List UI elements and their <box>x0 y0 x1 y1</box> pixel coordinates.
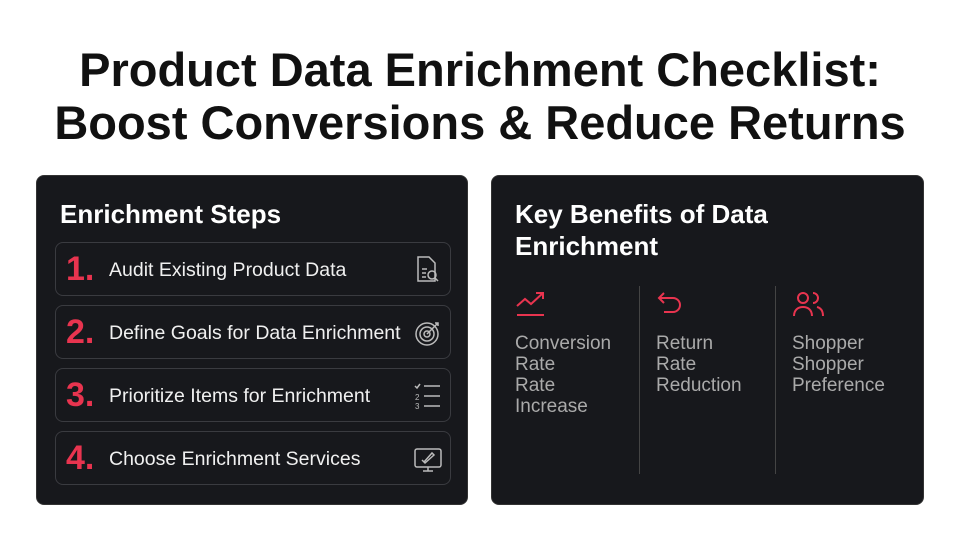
icon: rocket monitor <box>414 448 442 472</box>
step 3: Prioritize Items for Enrichment <box>109 385 370 407</box>
title <box>54 43 906 149</box>
benefit: shopper: Shopper <box>792 333 864 354</box>
benefit: return: Reduction <box>656 375 742 396</box>
title: Product Data Enrichment Checklist: <box>79 43 881 96</box>
step 3: 3. <box>66 376 94 414</box>
step 4 <box>55 431 451 485</box>
step 1: 1. <box>66 250 94 288</box>
step 4: Choose Enrichment Services <box>109 448 360 470</box>
panel: enrichment steps <box>36 175 468 505</box>
icon: target <box>415 322 439 346</box>
icon: numbered list: 3 <box>415 402 420 411</box>
benefit: conversion: Increase <box>515 396 588 417</box>
icon: document search <box>417 256 438 282</box>
step 1 <box>55 242 451 296</box>
heading: enrichment steps: Enrichment Steps <box>60 199 281 229</box>
icon: trend up <box>516 292 544 316</box>
benefit: return <box>656 292 742 396</box>
step 2: 2. <box>66 313 94 351</box>
step 1: Audit Existing Product Data <box>109 259 346 281</box>
benefit: conversion: Rate <box>515 354 555 375</box>
step 2: Define Goals for Data Enrichment <box>109 322 401 344</box>
heading: key benefits: Enrichment <box>515 231 658 261</box>
benefit: conversion: Rate <box>515 375 555 396</box>
step 2 <box>55 305 451 359</box>
panel: key benefits <box>491 175 924 505</box>
step 4: 4. <box>66 439 94 477</box>
step 3 <box>55 368 451 422</box>
benefit: return: Return <box>656 333 713 354</box>
icon: numbered list <box>414 384 440 411</box>
benefit: shopper <box>792 292 885 396</box>
heading: key benefits: Key Benefits of Data <box>515 199 768 229</box>
icon: numbered list: 2 <box>415 393 420 402</box>
title: Boost Conversions & Reduce Returns <box>54 96 906 149</box>
benefit: conversion <box>515 292 611 417</box>
benefit: return: Rate <box>656 354 696 375</box>
benefit: shopper: Preference <box>792 375 885 396</box>
heading: key benefits <box>515 199 768 261</box>
icon: users <box>793 292 824 316</box>
benefit: conversion: Conversion <box>515 333 611 354</box>
icon: return arrow <box>658 292 681 313</box>
benefit: shopper: Shopper <box>792 354 864 375</box>
